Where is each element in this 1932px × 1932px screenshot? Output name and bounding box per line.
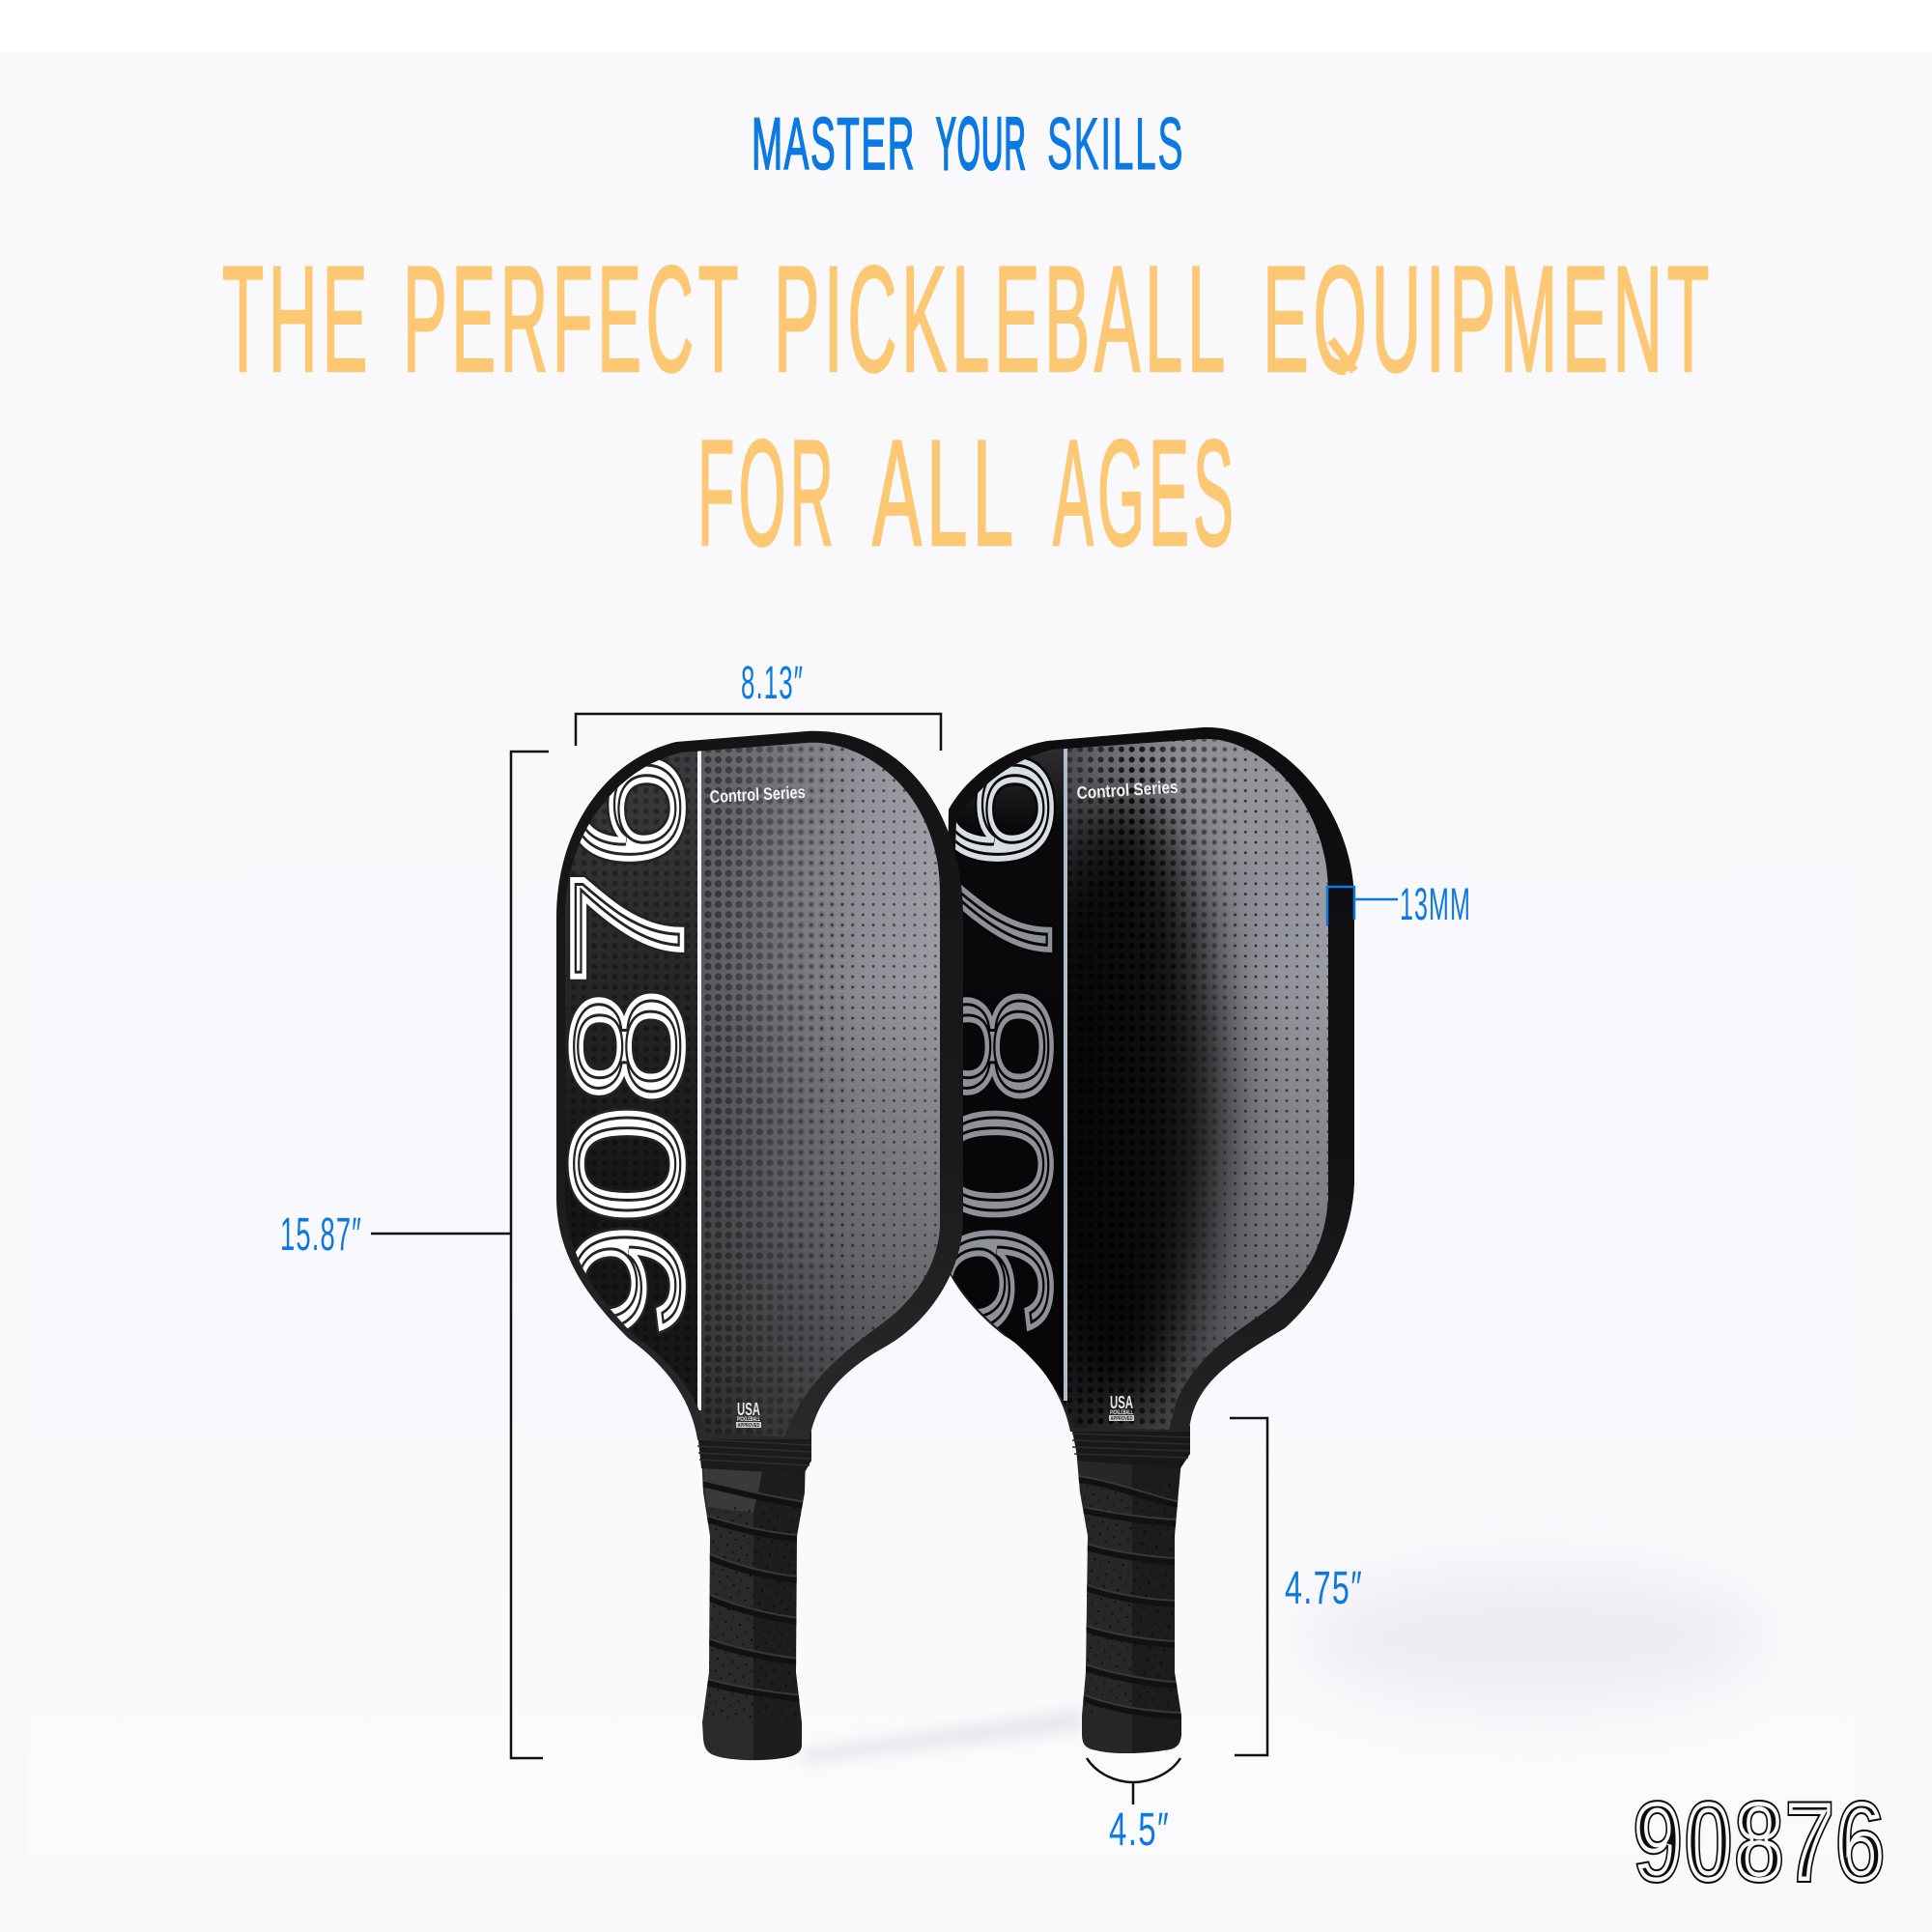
paddle: right (back)	[906, 724, 1354, 1758]
handle grip	[701, 1468, 806, 1760]
dimension: thickness 13mm: 13MM	[1400, 878, 1471, 929]
dimension: paddle width 8.13: 8.13″	[741, 658, 804, 709]
strip numerals: 90876	[906, 752, 1084, 1341]
paddle face	[951, 738, 1328, 1430]
dimension: grip circumference 4.5	[1087, 1758, 1180, 1856]
title: PICKLEBALL	[774, 236, 1230, 404]
dimension: handle length 4.75: 4.75″	[1285, 1563, 1363, 1614]
usa pickleball badge	[736, 1400, 761, 1429]
dimension: thickness 13mm	[1327, 878, 1471, 929]
eyebrow heading: SKILLS	[1047, 103, 1184, 185]
handle grip	[1076, 1451, 1181, 1753]
face divider line	[697, 744, 701, 1410]
usa pickleball badge: APPROVED	[738, 1423, 760, 1429]
handle collar	[697, 1432, 811, 1474]
floor shadows	[802, 1570, 1768, 1764]
title: THE	[222, 236, 372, 404]
face divider line	[1064, 744, 1067, 1401]
strip numerals	[566, 758, 688, 1335]
dimension: paddle height 15.87: 15.87″	[280, 1209, 362, 1261]
title: AGES	[1053, 410, 1237, 578]
usa pickleball badge	[1109, 1393, 1134, 1422]
title: PERFECT	[403, 236, 743, 404]
handle collar	[1071, 1426, 1190, 1468]
paddle rim	[556, 731, 963, 1439]
strip numerals: 90876	[906, 752, 1084, 1341]
eyebrow heading: YOUR	[936, 103, 1027, 185]
usa pickleball badge: PICKLEBALL	[737, 1417, 760, 1423]
title	[223, 265, 1708, 548]
dimension: paddle width 8.13	[576, 658, 941, 751]
usa pickleball badge: USA	[737, 1400, 760, 1419]
title: FOR	[697, 410, 838, 578]
strip numerals: 90876	[538, 752, 716, 1341]
dimension: grip circumference 4.5: 4.5″	[1109, 1804, 1170, 1856]
top white band	[0, 0, 1932, 52]
usa pickleball badge: APPROVED	[1111, 1416, 1133, 1422]
series label: Control Series	[709, 782, 806, 807]
dimension: paddle height 15.87	[280, 752, 549, 1758]
strip numerals: 90876	[538, 752, 716, 1341]
series label: Control Series	[1076, 778, 1179, 803]
usa pickleball badge: USA	[1110, 1393, 1133, 1412]
paddle: left (front)	[538, 724, 963, 1763]
paddle rim	[942, 727, 1354, 1432]
eyebrow heading: MASTER	[752, 103, 916, 185]
paddle face	[565, 742, 940, 1436]
strip numerals	[951, 757, 1056, 1331]
panel: product photo	[27, 644, 1855, 1855]
usa pickleball badge: PICKLEBALL	[1110, 1410, 1133, 1416]
title: ALL	[872, 410, 1018, 578]
dimension: handle length 4.75	[1230, 1418, 1363, 1755]
